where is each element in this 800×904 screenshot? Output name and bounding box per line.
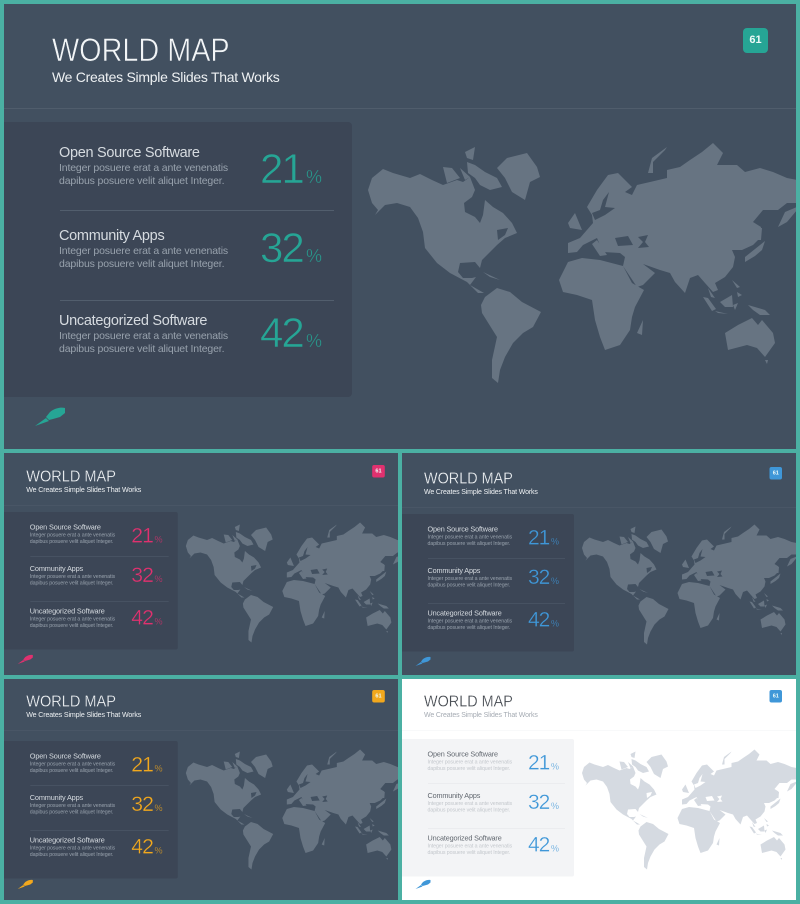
- stat row: open source software: Integer posuere erat a ante venenatis: [30, 532, 115, 538]
- stat row: uncategorized software: dapibus posuere velit aliquet Integer.: [428, 850, 510, 856]
- stat row: uncategorized software: Integer posuere erat a ante venenatis: [59, 330, 228, 342]
- stat row: open source software: dapibus posuere velit aliquet Integer.: [428, 766, 510, 772]
- stat row: uncategorized software: [30, 834, 163, 858]
- stat row: open source software: 21: [528, 526, 549, 549]
- stat row: community apps: [428, 565, 559, 588]
- stat row: community apps: Integer posuere erat a ante venenatis: [30, 802, 115, 808]
- stat row: open source software: 21: [131, 752, 153, 776]
- stat row: open source software: 21: [131, 524, 153, 547]
- stat row: uncategorized software: %: [155, 846, 163, 856]
- stat row: open source software: %: [551, 762, 559, 772]
- icon: rocket: [416, 656, 430, 666]
- icon: rocket: [18, 654, 33, 664]
- stat row: uncategorized software: Uncategorized Software: [30, 608, 105, 616]
- panel group: statistics: [4, 741, 178, 878]
- stat row: uncategorized software: %: [306, 331, 322, 351]
- stat row: open source software: Integer posuere erat a ante venenatis: [30, 761, 115, 767]
- stat row: community apps: %: [155, 574, 163, 584]
- stat row: community apps: dapibus posuere velit aliquet Integer.: [30, 580, 113, 586]
- stat row: open source software: 21: [260, 145, 303, 192]
- panel group: statistics: [402, 739, 574, 876]
- stat row: uncategorized software: [59, 309, 322, 356]
- stat row: open source software: Integer posuere erat a ante venenatis: [428, 534, 512, 540]
- page badge: [372, 465, 385, 478]
- stat row: uncategorized software: Uncategorized Software: [428, 834, 502, 842]
- stat row: open source software: dapibus posuere velit aliquet Integer.: [30, 538, 113, 544]
- panel: statistics: [398, 514, 574, 652]
- stat row: community apps: Integer posuere erat a ante venenatis: [428, 800, 512, 806]
- slide: blue variant: [402, 453, 796, 675]
- world map: [582, 524, 796, 644]
- stat row: uncategorized software: Integer posuere erat a ante venenatis: [428, 843, 512, 849]
- page badge: 61: [375, 468, 382, 474]
- panel: statistics: [0, 122, 352, 397]
- stat row: open source software: dapibus posuere velit aliquet Integer.: [59, 175, 224, 187]
- stat row: open source software: Integer posuere erat a ante venenatis: [428, 759, 512, 765]
- panel: statistics: [0, 741, 178, 878]
- stat row: uncategorized software: %: [551, 844, 559, 854]
- stat row: community apps: Community Apps: [428, 567, 480, 575]
- stat row: uncategorized software: dapibus posuere velit aliquet Integer.: [30, 852, 113, 858]
- stat row: uncategorized software: dapibus posuere velit aliquet Integer.: [59, 343, 224, 355]
- title: WORLD MAP: [26, 692, 116, 710]
- stat row: community apps: 32: [131, 792, 153, 816]
- subtitle: We Creates Simple Slides That Works: [26, 710, 141, 718]
- stat row: uncategorized software: [30, 606, 163, 629]
- stat row: open source software: 21: [528, 750, 549, 774]
- stat row: open source software: %: [306, 167, 322, 187]
- stat row: community apps: Integer posuere erat a ante venenatis: [30, 574, 115, 580]
- stat row: uncategorized software: dapibus posuere velit aliquet Integer.: [30, 622, 113, 628]
- stat row: open source software: Open Source Software: [30, 752, 101, 760]
- stat row: open source software: dapibus posuere velit aliquet Integer.: [428, 540, 510, 546]
- page badge: [372, 690, 385, 702]
- world map: [186, 750, 398, 870]
- stat row: uncategorized software: 42: [260, 309, 303, 356]
- page badge: [770, 467, 782, 480]
- slide: main teal: [4, 4, 796, 449]
- stat row: uncategorized software: %: [155, 616, 163, 626]
- stat row: open source software: %: [155, 764, 163, 774]
- stat row: open source software: Open Source Software: [30, 524, 101, 532]
- page badge: [743, 28, 768, 53]
- stat row: uncategorized software: dapibus posuere velit aliquet Integer.: [428, 624, 510, 630]
- page badge: 61: [749, 34, 762, 46]
- stat row: community apps: Community Apps: [30, 565, 83, 573]
- panel: statistics: [0, 512, 178, 650]
- subtitle: We Creates Simple Slides That Works: [424, 488, 538, 496]
- subtitle: We Creates Simple Slides That Works: [424, 710, 538, 718]
- stat row: open source software: %: [551, 536, 559, 546]
- stat row: community apps: 32: [260, 224, 303, 271]
- stat row: uncategorized software: Integer posuere erat a ante venenatis: [428, 618, 512, 624]
- page badge: 61: [773, 693, 779, 699]
- panel: statistics: [398, 739, 574, 876]
- stat row: community apps: Community Apps: [30, 794, 83, 802]
- stat row: uncategorized software: Uncategorized Software: [30, 836, 105, 844]
- stat row: community apps: dapibus posuere velit aliquet Integer.: [428, 807, 510, 813]
- stat row: uncategorized software: %: [551, 618, 559, 628]
- icon: rocket: [35, 408, 65, 426]
- slide: light variant: [402, 679, 796, 900]
- stat row: community apps: Integer posuere erat a ante venenatis: [59, 245, 228, 257]
- world map: [582, 750, 796, 870]
- world map: [186, 522, 398, 642]
- stat row: uncategorized software: [428, 832, 559, 856]
- stat row: community apps: %: [306, 246, 322, 266]
- page badge: 61: [375, 693, 382, 699]
- world map: [368, 143, 796, 383]
- title: WORLD MAP: [52, 32, 230, 68]
- icon: rocket: [416, 880, 430, 889]
- stat row: uncategorized software: Uncategorized Software: [59, 313, 207, 329]
- page badge: [770, 690, 782, 702]
- stat row: community apps: %: [551, 576, 559, 586]
- stat row: open source software: [30, 752, 163, 776]
- stat row: community apps: 32: [528, 565, 549, 588]
- stat row: uncategorized software: 42: [528, 832, 549, 856]
- stat row: uncategorized software: Integer posuere erat a ante venenatis: [30, 616, 115, 622]
- stat row: uncategorized software: 42: [131, 606, 153, 629]
- stat row: open source software: dapibus posuere velit aliquet Integer.: [30, 768, 113, 774]
- stat row: community apps: [30, 792, 163, 816]
- stat row: open source software: [428, 526, 559, 549]
- title: WORLD MAP: [26, 467, 116, 485]
- stat row: community apps: %: [155, 803, 163, 813]
- title: WORLD MAP: [424, 692, 513, 710]
- stat row: open source software: [30, 524, 163, 547]
- stat row: uncategorized software: Integer posuere erat a ante venenatis: [30, 845, 115, 851]
- stat row: community apps: Community Apps: [59, 228, 164, 244]
- stat row: community apps: dapibus posuere velit aliquet Integer.: [428, 582, 510, 588]
- stat row: uncategorized software: 42: [131, 834, 153, 858]
- stat row: community apps: [30, 563, 163, 586]
- stat row: open source software: [59, 145, 322, 192]
- stat row: open source software: Integer posuere erat a ante venenatis: [59, 162, 228, 174]
- stat row: community apps: Community Apps: [428, 792, 480, 800]
- icon: rocket: [18, 880, 33, 889]
- stat row: uncategorized software: 42: [528, 608, 549, 631]
- subtitle: We Creates Simple Slides That Works: [26, 486, 141, 494]
- stat row: open source software: [428, 750, 559, 774]
- stat row: community apps: Integer posuere erat a ante venenatis: [428, 576, 512, 582]
- stat row: uncategorized software: [428, 608, 559, 631]
- stat row: community apps: [59, 224, 322, 271]
- slide: pink variant: [4, 453, 398, 675]
- stat row: open source software: Open Source Software: [59, 145, 200, 161]
- slide: amber variant: [4, 679, 398, 900]
- stat row: community apps: [428, 790, 559, 814]
- stat row: community apps: 32: [131, 563, 153, 586]
- stat row: community apps: dapibus posuere velit aliquet Integer.: [30, 809, 113, 815]
- stat row: community apps: dapibus posuere velit aliquet Integer.: [59, 258, 224, 270]
- stat row: community apps: %: [551, 801, 559, 811]
- page badge: 61: [773, 470, 779, 476]
- subtitle: We Creates Simple Slides That Works: [52, 69, 280, 85]
- stat row: open source software: Open Source Software: [428, 526, 498, 534]
- stat row: open source software: %: [155, 534, 163, 544]
- stat row: community apps: 32: [528, 790, 549, 814]
- title: WORLD MAP: [424, 469, 513, 487]
- stat row: open source software: Open Source Software: [428, 750, 498, 758]
- stat row: uncategorized software: Uncategorized Software: [428, 610, 502, 618]
